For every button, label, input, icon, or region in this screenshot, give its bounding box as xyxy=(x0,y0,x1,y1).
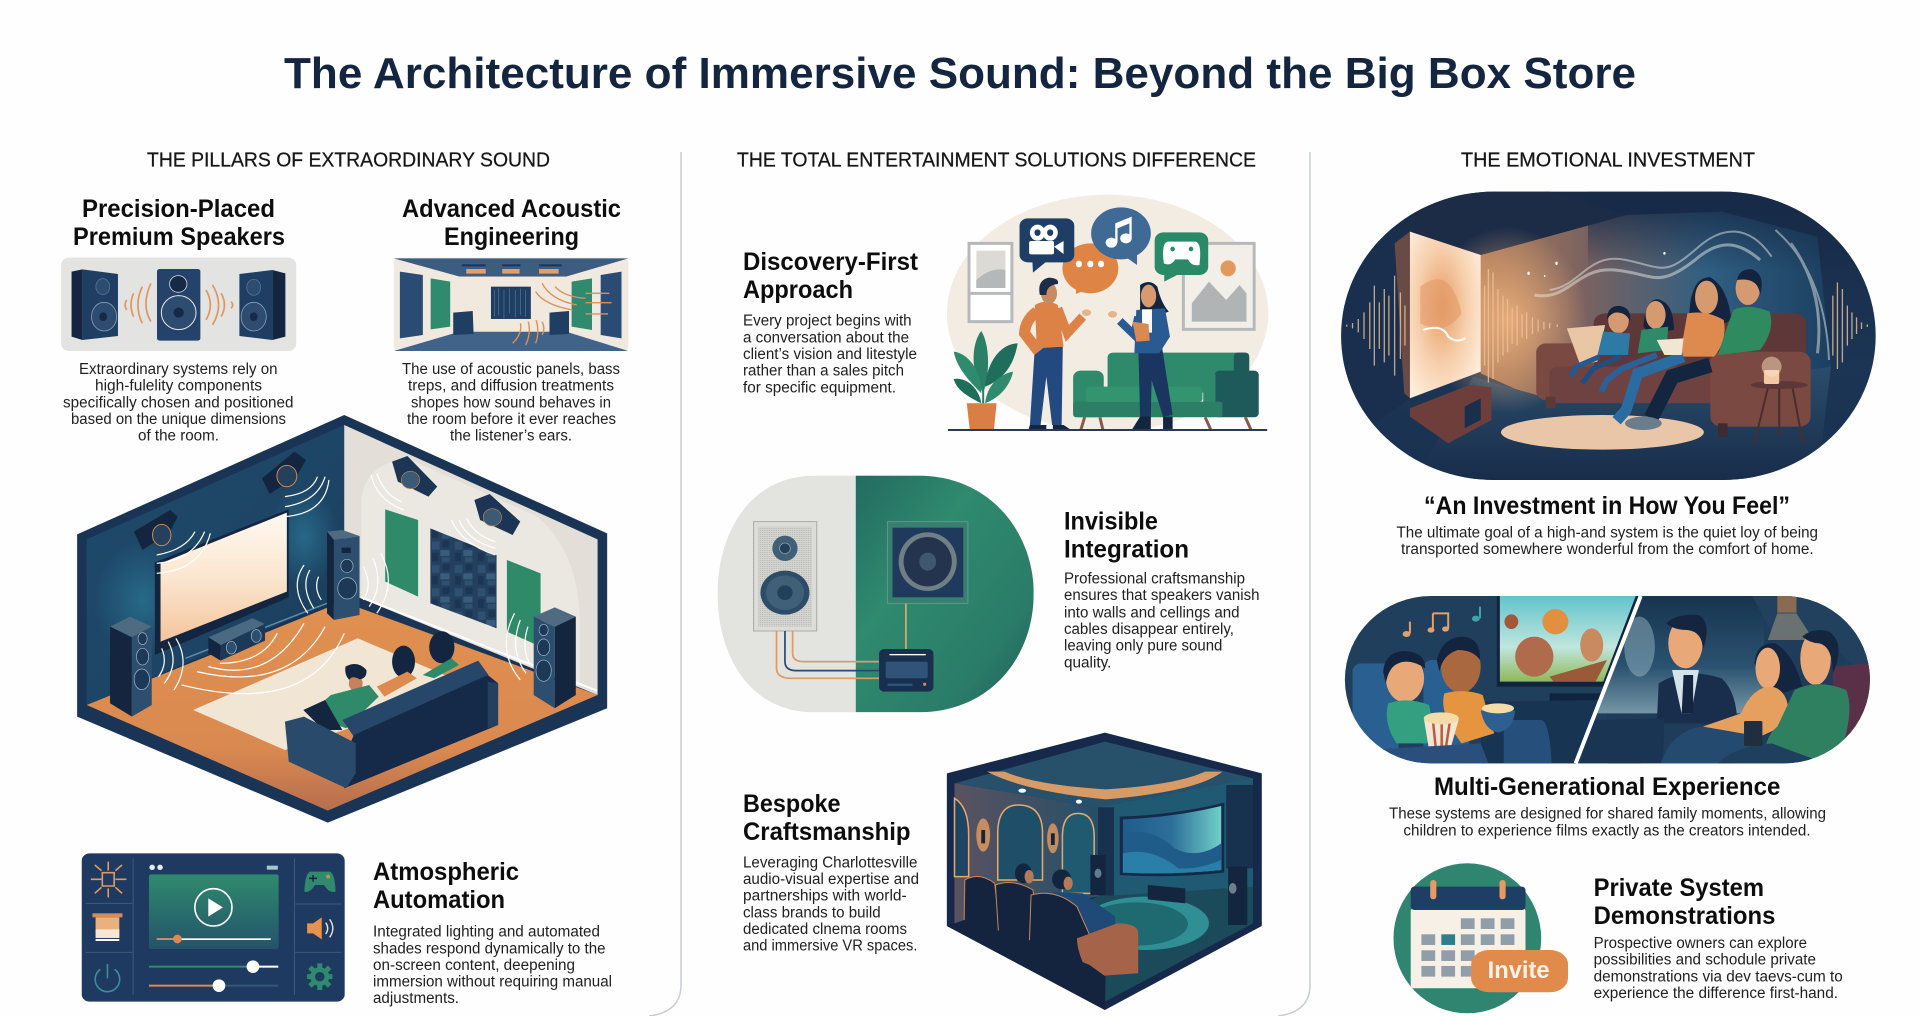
music notes xyxy=(1410,607,1480,633)
text: discovery description xyxy=(743,313,917,396)
heading: precision-placed premium speakers: Precision-Placed xyxy=(82,195,275,223)
acoustic panels xyxy=(385,509,541,647)
panel: pillars of extraordinary sound xyxy=(61,150,628,1007)
text: multi-generational description: children to experience films exactly as the creators intended. xyxy=(1403,822,1811,839)
text: demonstrations description: Prospective owners can explore xyxy=(1594,935,1807,952)
text: integration description: into walls and cellings and xyxy=(1064,604,1240,621)
heading: bespoke craftsmanship: Craftsmanship xyxy=(743,818,910,846)
text: speakers description: based on the unique dimensions xyxy=(71,411,286,428)
text: integration description xyxy=(1064,570,1260,671)
wires xyxy=(777,603,906,678)
child xyxy=(1608,307,1629,333)
heading: atmospheric automation: Atmospheric xyxy=(373,858,519,886)
arches and sconces xyxy=(954,789,1094,893)
heading: advanced acoustic engineering: Engineering xyxy=(444,223,579,251)
heading: discovery-first approach xyxy=(743,248,919,304)
illustration: family watching in oval frame xyxy=(1341,192,1876,480)
heading: bespoke craftsmanship: Bespoke xyxy=(743,790,841,818)
sliders xyxy=(149,960,278,992)
in-wall speaker xyxy=(888,522,968,603)
text: automation description: shades respond dynamically to the xyxy=(373,940,606,957)
text: speakers description: high-fulelity components xyxy=(95,378,262,395)
sound ribbons xyxy=(1534,230,1829,360)
text: integration description: quality. xyxy=(1064,654,1111,671)
text: discovery description: for specific equipment. xyxy=(743,379,896,396)
illustration: invisible in-wall speakers xyxy=(715,473,1036,713)
text: integration description: ensures that speakers vanish xyxy=(1064,587,1260,604)
icon: sun xyxy=(91,862,126,897)
text: investment description xyxy=(1396,524,1818,558)
heading: advanced acoustic engineering: Advanced Acoustic xyxy=(402,195,621,223)
text: automation description: on-screen content, deepening xyxy=(373,957,575,974)
illustration: isometric home theater room xyxy=(77,415,607,823)
window dots xyxy=(149,865,278,870)
diagonal divider xyxy=(1576,596,1641,763)
cove light xyxy=(987,771,1222,799)
text: multi-generational description xyxy=(1389,806,1826,839)
icon: calendar invite: Invite xyxy=(1488,957,1550,984)
icon: window shade xyxy=(92,913,122,941)
side table and candle xyxy=(1751,357,1808,443)
illustration: consultation scene xyxy=(947,195,1268,432)
floor rug and speakers xyxy=(1083,855,1247,950)
tv xyxy=(1497,596,1641,687)
text: discovery description: Every project begins with xyxy=(743,313,912,330)
text: multi-generational description: These systems are designed for shared family moments, allowing xyxy=(1389,806,1826,823)
text: acoustic description: the listener’s ears. xyxy=(450,428,572,445)
kids xyxy=(1382,636,1516,764)
seats xyxy=(1353,663,1398,763)
icon: power xyxy=(95,964,120,992)
wall frames xyxy=(969,243,1254,329)
panel: the emotional investment xyxy=(1341,150,1876,1013)
text: speakers description: Extraordinary systems rely on xyxy=(79,361,278,378)
text: bespoke description: dedicated clnema rooms xyxy=(743,921,907,938)
text: speakers description: of the room. xyxy=(138,428,219,445)
text: discovery description: a conversation about the xyxy=(743,329,909,346)
text: acoustic description: the room before it ever reaches xyxy=(407,411,616,428)
text: bespoke description xyxy=(743,854,919,955)
heading: discovery-first approach: Discovery-First xyxy=(743,248,919,276)
heading: private system demonstrations: Private System xyxy=(1594,874,1764,902)
text: bespoke description: Leveraging Charlottesville xyxy=(743,854,917,871)
illustration: automation control panel xyxy=(82,853,345,1002)
text: bespoke description: audio-visual expertise and xyxy=(743,871,919,888)
glowing screen xyxy=(1410,232,1481,398)
plant xyxy=(954,331,1018,430)
text: automation description xyxy=(373,924,612,1007)
woman xyxy=(1108,282,1173,430)
visible speaker xyxy=(754,522,817,631)
center channel speaker xyxy=(208,618,265,661)
illustration: three speakers xyxy=(61,258,296,351)
amplifier xyxy=(879,649,933,692)
text: integration description: leaving only pure sound xyxy=(1064,638,1222,655)
sofa xyxy=(1073,353,1259,430)
heading: private system demonstrations xyxy=(1594,874,1775,930)
heading: bespoke craftsmanship xyxy=(743,790,910,846)
icon: calendar invite xyxy=(1393,863,1568,1013)
recliners xyxy=(947,877,1138,1010)
text: acoustic description: shopes how sound behaves in xyxy=(411,394,611,411)
text: automation description: adjustments. xyxy=(373,990,459,1007)
heading: atmospheric automation: Automation xyxy=(373,886,505,914)
heading: multi-generational experience: Multi-Generational Experience xyxy=(1434,773,1780,801)
adult man xyxy=(1657,615,1737,723)
right half: night screen xyxy=(1596,596,1764,713)
icon: gamepad xyxy=(304,872,336,892)
sound waves xyxy=(157,473,532,694)
section heading: pillars: THE PILLARS OF EXTRAORDINARY SOUND xyxy=(147,150,550,172)
text: automation description: Integrated lighting and automated xyxy=(373,924,600,941)
text: acoustic description xyxy=(402,361,620,445)
tower speakers xyxy=(110,530,576,717)
adult woman xyxy=(1661,643,1802,763)
dark lower room xyxy=(1481,700,1599,763)
girl xyxy=(1643,299,1674,333)
screen with play button xyxy=(149,874,279,949)
man xyxy=(1025,278,1091,430)
panel: total entertainment solutions difference xyxy=(715,150,1268,1010)
column divider right xyxy=(1278,152,1310,1016)
illustration: acoustic treatment room xyxy=(394,258,628,351)
section heading: difference: THE TOTAL ENTERTAINMENT SOLUTIONS DIFFERENCE xyxy=(737,150,1256,172)
text: investment description: transported somewhere wonderful from the comfort of home. xyxy=(1401,541,1814,558)
text: automation description: immersion without requiring manual xyxy=(373,974,612,991)
text: speakers description: specifically chosen and positioned xyxy=(63,394,294,411)
text: discovery description: rather than a sales pitch xyxy=(743,363,904,380)
title: The Architecture of Immersive Sound: Beyond the Big Box Store xyxy=(284,49,1636,98)
tv stand xyxy=(1410,385,1491,443)
heading: discovery-first approach: Approach xyxy=(743,276,853,304)
ceiling speakers xyxy=(134,452,520,550)
family xyxy=(1571,269,1771,430)
waveform bars xyxy=(1347,269,1867,382)
heading: invisible integration: Integration xyxy=(1064,536,1189,564)
heading: invisible integration xyxy=(1064,508,1189,564)
heading: atmospheric automation xyxy=(373,858,519,914)
section heading: emotional investment: THE EMOTIONAL INVESTMENT xyxy=(1461,150,1755,172)
mother xyxy=(1687,277,1731,327)
text: bespoke description: class brands to build xyxy=(743,904,881,921)
sofa and viewers xyxy=(285,631,498,788)
heading: advanced acoustic engineering xyxy=(402,195,621,251)
text: investment description: The ultimate goal of a high-and system is the quiet loy of being xyxy=(1396,524,1818,541)
text: acoustic description: The use of acoustic panels, bass xyxy=(402,361,620,378)
heading: invisible integration: Invisible xyxy=(1064,508,1158,536)
text: demonstrations description: experience the difference first-hand. xyxy=(1594,985,1838,1002)
text: bespoke description: and immersive VR spaces. xyxy=(743,938,917,955)
curved screen xyxy=(1120,803,1224,876)
text: demonstrations description xyxy=(1594,935,1843,1002)
screen xyxy=(155,509,289,655)
heading: precision-placed premium speakers: Premium Speakers xyxy=(73,223,285,251)
adult father xyxy=(1718,630,1849,763)
father xyxy=(1736,272,1760,305)
curtain columns xyxy=(1098,785,1253,896)
illustration: dedicated cinema room xyxy=(947,733,1262,1010)
text: bespoke description: partnerships with world- xyxy=(743,888,907,905)
sofa xyxy=(1536,313,1811,437)
text: demonstrations description: possibilities and schodule private xyxy=(1594,952,1816,969)
text: speakers description xyxy=(63,361,294,445)
rug xyxy=(193,638,472,750)
text: integration description: Professional craftsmanship xyxy=(1064,570,1245,587)
icon: gear xyxy=(307,963,332,990)
text: integration description: cables disappear entirely, xyxy=(1064,621,1234,638)
speech bubbles xyxy=(1020,207,1208,294)
icon: volume xyxy=(307,917,333,939)
text: demonstrations description: demonstrations via dev taevs-cum to xyxy=(1594,968,1843,985)
text: discovery description: client’s vision and litestyle xyxy=(743,346,917,363)
text: acoustic description: treps, and diffusion treatments xyxy=(408,378,614,395)
column divider left xyxy=(649,152,681,1016)
heading: private system demonstrations: Demonstrations xyxy=(1594,902,1775,930)
illustration: multi-generational viewers pill xyxy=(1343,595,1875,765)
heading: an investment in how you feel: “An Investment in How You Feel” xyxy=(1424,492,1790,520)
rug xyxy=(1501,415,1704,450)
heading: precision-placed premium speakers xyxy=(73,195,285,251)
viewers xyxy=(1015,863,1115,933)
